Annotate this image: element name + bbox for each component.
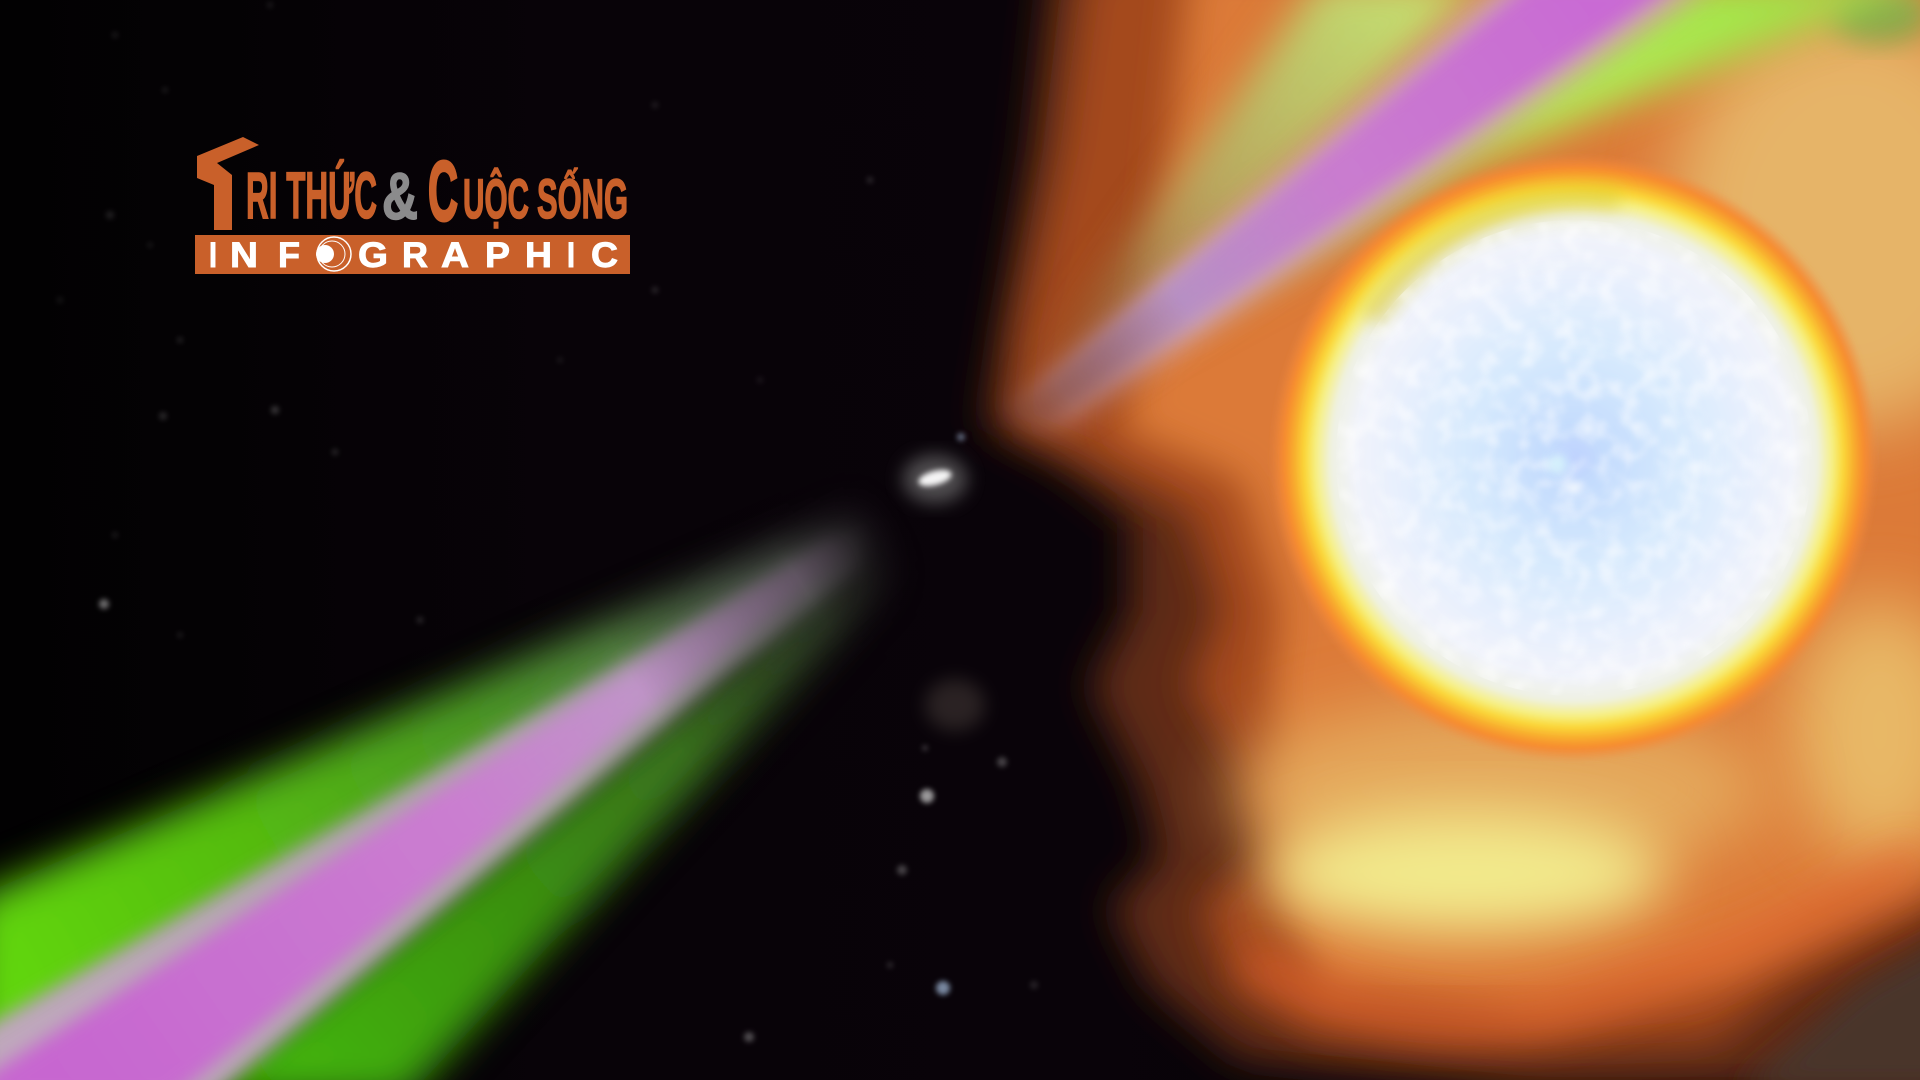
pulsar (903, 455, 967, 503)
logo banner text (209, 236, 618, 275)
background stars (57, 2, 1038, 1042)
pulsar core (917, 467, 953, 489)
green lower band (216, 576, 883, 1080)
star surface mottling (1336, 220, 1812, 696)
star centre highlight (1549, 455, 1567, 473)
logo banner text: G (358, 236, 388, 275)
logo banner text: C (591, 236, 618, 275)
nebula: orange gas cloud around companion star (985, 0, 1920, 1080)
pale pink border (0, 525, 860, 1080)
logo banner text: P (485, 236, 510, 275)
nebula base (1012, 0, 1920, 1050)
companion star (1270, 154, 1878, 762)
lower-left beam (0, 505, 895, 1080)
nebula inner orange (1120, 0, 1920, 1015)
logo wordmark: UỘC (463, 167, 529, 230)
nebula yellow glow (1265, 811, 1665, 935)
pulsar glow (903, 455, 967, 503)
nebula tan below star (1230, 700, 1770, 880)
right green band (1267, 0, 1914, 292)
logo banner (195, 235, 630, 274)
logo banner text: I (567, 236, 575, 275)
upper-right beam (1000, 0, 1920, 430)
nebula red-orange lower rim (1250, 860, 1920, 1022)
left green band (1066, 0, 1486, 346)
logo banner text: N (230, 236, 258, 275)
logo wordmark (246, 144, 628, 238)
logo banner text: F (278, 236, 300, 275)
nebula dark corner (1740, 930, 1920, 1080)
nebula green patch top right (1830, 0, 1920, 43)
grey haze near pulsar (771, 602, 820, 642)
logo wordmark: & (382, 159, 418, 233)
nebula tan right (1790, 600, 1920, 860)
logo banner text: A (441, 236, 469, 275)
nebula light tan upper right (1670, 10, 1920, 430)
nebula dark brown fringe (985, 0, 1920, 1080)
logo wordmark: SỐNG (537, 167, 628, 230)
magenta core (0, 535, 840, 1080)
logo O icon (316, 237, 351, 271)
star disc (1270, 154, 1878, 762)
logo banner text: R (402, 236, 428, 275)
pale pink border (1000, 0, 1712, 430)
magenta core (1005, 0, 1682, 425)
logo wordmark: RI THỨC (246, 158, 377, 232)
logo banner text: H (525, 236, 552, 275)
logo T icon (197, 137, 259, 230)
bright green upper band (0, 514, 840, 1035)
star upper rim gold tint (1370, 198, 1620, 320)
logo banner text: I (209, 236, 217, 275)
logo wordmark: C (428, 144, 458, 238)
logo: Tri Thức & Cuộc Sống Infographic (195, 137, 630, 275)
